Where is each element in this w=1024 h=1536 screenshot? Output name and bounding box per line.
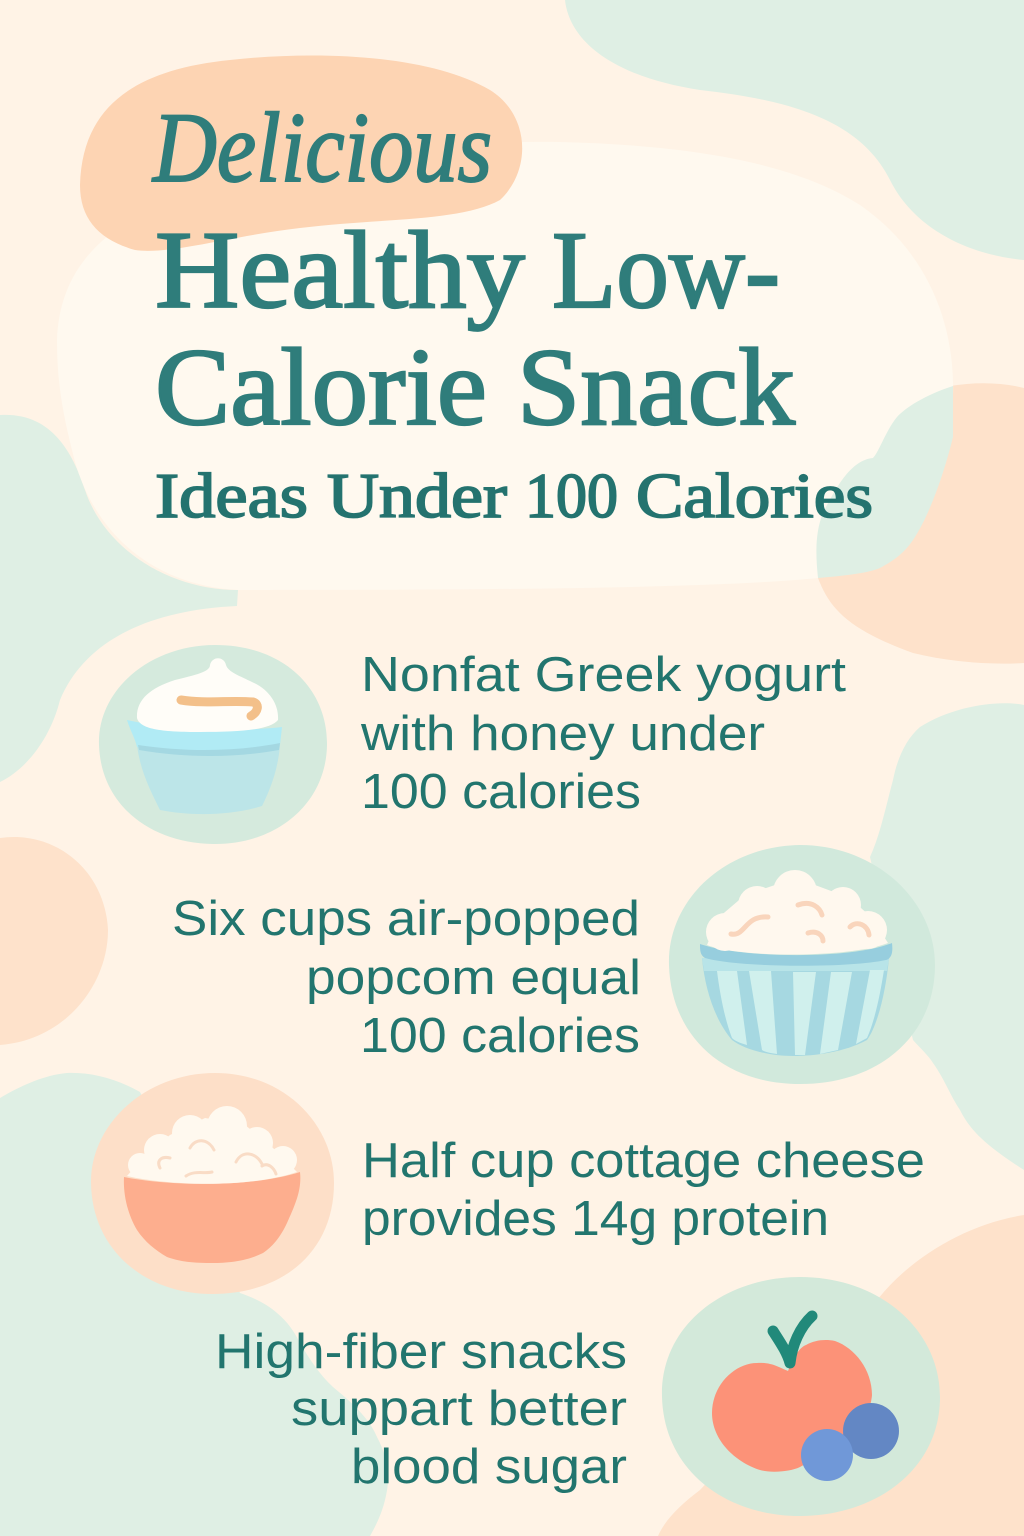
text: cottage cheese fact: [362, 1134, 925, 1246]
text: yogurt fact: with honey under: [360, 707, 765, 761]
heading: Calorie Snack: Calorie: [155, 326, 487, 448]
text: popcorn fact: 100 calories: [360, 1009, 640, 1063]
text: fiber fact: suppart better: [291, 1382, 627, 1436]
text: yogurt fact: 100 calories: [361, 765, 641, 819]
heading: Calorie Snack: Snack: [517, 326, 795, 448]
panel: title: [80, 55, 873, 531]
text: fiber fact: [215, 1325, 627, 1494]
text: popcorn fact: [172, 892, 641, 1063]
icon: cottage cheese bowl: [91, 1073, 334, 1294]
panel: cottage cheese snack: [91, 1073, 925, 1294]
subtitle: Ideas Under 100 Calories: 100: [525, 460, 618, 531]
heading: Delicious: Delicious: [151, 92, 492, 203]
text: fiber fact: blood sugar: [351, 1440, 627, 1494]
text: yogurt fact: Nonfat Greek yogurt: [361, 648, 846, 702]
title highlight blob: [80, 55, 522, 251]
text: fiber fact: High-fiber snacks: [215, 1325, 627, 1379]
text: popcorn fact: popcom equal: [306, 951, 641, 1005]
text: popcorn fact: Six cups air-popped: [172, 892, 640, 946]
text: cottage cheese fact: Half cup cottage cheese: [362, 1134, 925, 1188]
panel: popcorn snack: [172, 845, 935, 1084]
subtitle: Ideas Under 100 Calories: Under: [327, 460, 507, 531]
subtitle: Ideas Under 100 Calories: Calories: [636, 460, 873, 531]
panel: yogurt snack: [99, 645, 846, 844]
text: cottage cheese fact: provides 14g protein: [362, 1192, 829, 1246]
icon: yogurt cup: [99, 645, 327, 844]
panel: high-fiber snack: [215, 1277, 940, 1516]
heading: Calorie Snack: [155, 326, 795, 448]
subtitle: Ideas Under 100 Calories: Ideas: [155, 460, 308, 531]
heading: Healthy Low-: Low-: [552, 209, 780, 331]
heading: Healthy Low-: Healthy: [155, 209, 525, 331]
text: yogurt fact: [360, 648, 846, 819]
icon: popcorn bowl: [669, 845, 935, 1084]
subtitle: Ideas Under 100 Calories: [155, 460, 873, 531]
heading: Healthy Low-: [155, 209, 780, 331]
icon: apple and blueberries: [662, 1277, 940, 1516]
